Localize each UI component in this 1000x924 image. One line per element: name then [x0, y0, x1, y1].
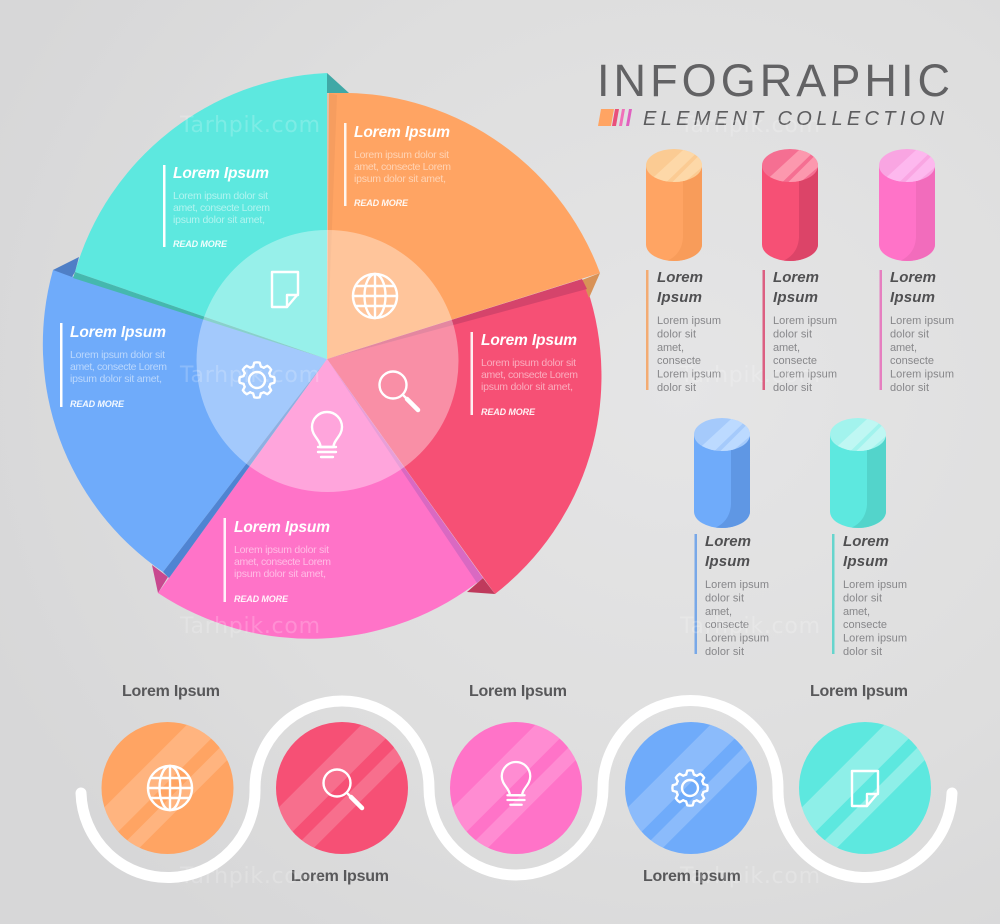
label: red cylinder: Lorem — [773, 269, 819, 286]
colour marks — [598, 109, 632, 126]
text block: blue slice: Lorem ipsum dolor sit — [70, 349, 165, 361]
label: blue cylinder: consecte — [705, 619, 749, 631]
label: teal cylinder: Lorem ipsum — [843, 632, 907, 644]
step label 5: Lorem Ipsum — [810, 683, 908, 700]
label: teal cylinder: Lorem — [843, 533, 889, 550]
text block: orange slice: READ MORE — [354, 198, 409, 208]
step: orange circle — [96, 717, 234, 854]
label: orange cylinder: dolor sit — [657, 382, 696, 394]
text block: pink slice: amet, consecte Lorem — [234, 556, 331, 568]
icon: search — [324, 770, 362, 808]
watermarks: Tarhpik.com — [179, 864, 320, 889]
text block: blue slice: ipsum dolor sit amet, — [70, 373, 162, 385]
label: orange cylinder: Lorem ipsum — [657, 315, 721, 327]
cylinder: orange — [646, 146, 704, 261]
text block: teal slice: Lorem ipsum dolor sit — [173, 190, 268, 202]
text block: red slice: ipsum dolor sit amet, — [481, 381, 573, 393]
text block: red slice: READ MORE — [481, 407, 536, 417]
label: blue cylinder — [694, 533, 769, 658]
label: red cylinder: amet, — [773, 342, 800, 354]
label: blue cylinder: Lorem — [705, 533, 751, 550]
label: teal cylinder: amet, — [843, 606, 870, 618]
text block: blue slice: amet, consecte Lorem — [70, 361, 167, 373]
label: blue cylinder: Ipsum — [705, 553, 750, 570]
label: orange cylinder: Ipsum — [657, 289, 702, 306]
label: teal cylinder: dolor sit — [843, 646, 882, 658]
step: teal circle — [794, 717, 931, 854]
center disc — [196, 230, 458, 492]
step: pink circle — [445, 717, 582, 854]
text block: orange slice: Lorem ipsum dolor sit — [354, 149, 449, 161]
text block: blue slice: Lorem Ipsum — [70, 324, 166, 341]
fold: red flap — [467, 578, 495, 594]
watermarks — [179, 113, 820, 889]
label: blue cylinder: dolor sit — [705, 646, 744, 658]
text block: orange slice: ipsum dolor sit amet, — [354, 173, 446, 185]
cylinder: blue — [694, 414, 752, 528]
text block: red slice: amet, consecte Lorem — [481, 369, 578, 381]
fold: teal flap — [327, 73, 349, 93]
icon: document — [272, 272, 298, 307]
label: blue cylinder: dolor sit — [705, 592, 744, 604]
icon: document — [852, 771, 878, 806]
label: red cylinder: consecte — [773, 355, 817, 367]
icon: globe — [353, 274, 397, 318]
label: teal cylinder: consecte — [843, 619, 887, 631]
text block: red slice: Lorem Ipsum — [481, 332, 577, 349]
watermarks: Tarhpik.com — [679, 113, 820, 138]
cylinder: pink — [879, 146, 937, 261]
slice: pink — [158, 359, 483, 639]
label: orange cylinder: Lorem ipsum — [657, 368, 721, 380]
icon: search — [380, 372, 418, 410]
pie chart — [43, 73, 601, 639]
text block: teal slice: amet, consecte Lorem — [173, 202, 270, 214]
text block: orange slice: Lorem Ipsum — [354, 124, 450, 141]
text block: teal slice: Lorem Ipsum — [173, 165, 269, 182]
text block: blue slice: READ MORE — [70, 399, 125, 409]
title — [597, 55, 950, 130]
label: pink cylinder: dolor sit — [890, 382, 929, 394]
step label 1: Lorem Ipsum — [122, 683, 220, 700]
step label 2: Lorem Ipsum — [291, 868, 389, 885]
label: teal cylinder: dolor sit — [843, 592, 882, 604]
text block: orange slice: amet, consecte Lorem — [354, 161, 451, 173]
label: orange cylinder: consecte — [657, 355, 701, 367]
slice: blue — [43, 270, 327, 572]
fold: blue strip — [163, 359, 327, 578]
icon: globe — [148, 766, 192, 810]
label: pink cylinder: Lorem — [890, 269, 936, 286]
text block: teal slice: READ MORE — [173, 239, 228, 249]
label: orange cylinder: Lorem — [657, 269, 703, 286]
step label 4: Lorem Ipsum — [643, 868, 741, 885]
watermarks: Tarhpik.com — [679, 363, 820, 388]
text block: pink slice: READ MORE — [234, 594, 289, 604]
fold: purple strip — [327, 359, 483, 583]
fold: red strip — [327, 279, 587, 359]
label: teal cylinder — [832, 533, 907, 658]
label: teal cylinder: Ipsum — [843, 553, 888, 570]
label: red cylinder: dolor sit — [773, 382, 812, 394]
watermarks: Tarhpik.com — [679, 864, 820, 889]
watermarks: Tarhpik.com — [179, 363, 320, 388]
step: blue circle — [620, 717, 757, 854]
fold: blue flap — [53, 257, 79, 277]
label: orange cylinder — [646, 269, 721, 394]
label: pink cylinder: dolor sit — [890, 328, 929, 340]
label: pink cylinder: Lorem ipsum — [890, 315, 954, 327]
label: blue cylinder: Lorem ipsum — [705, 579, 769, 591]
text block: blue slice — [60, 323, 167, 409]
label: red cylinder: Lorem ipsum — [773, 368, 837, 380]
text block: orange slice — [344, 123, 451, 208]
text block: red slice: Lorem ipsum dolor sit — [481, 357, 576, 369]
label: pink cylinder: Lorem ipsum — [890, 368, 954, 380]
cylinder: teal — [830, 414, 888, 528]
text block: pink slice — [224, 518, 331, 604]
slice: orange — [327, 93, 600, 359]
label: orange cylinder: dolor sit — [657, 328, 696, 340]
label: red cylinder: dolor sit — [773, 328, 812, 340]
fold: orange flap — [582, 273, 600, 298]
fold: orange left shade — [327, 93, 337, 358]
slice: teal — [75, 73, 327, 359]
text block: pink slice: Lorem Ipsum — [234, 519, 330, 536]
label: pink cylinder — [880, 269, 954, 394]
watermarks: Tarhpik.com — [179, 614, 320, 639]
cylinder: red — [762, 146, 820, 261]
slice: red — [327, 288, 601, 594]
icon: bulb — [502, 762, 530, 805]
fold: pink flap — [152, 565, 168, 593]
text block: teal slice — [163, 165, 270, 249]
watermarks: Tarhpik.com — [179, 113, 320, 138]
watermarks: Tarhpik.com — [679, 614, 820, 639]
text block: pink slice: Lorem ipsum dolor sit — [234, 544, 329, 556]
label: teal cylinder: Lorem ipsum — [843, 579, 907, 591]
text block: pink slice: ipsum dolor sit amet, — [234, 568, 326, 580]
timeline wave — [81, 701, 952, 878]
label: pink cylinder: consecte — [890, 355, 934, 367]
fold: teal strip — [73, 272, 327, 359]
text block: teal slice: ipsum dolor sit amet, — [173, 214, 265, 226]
label: blue cylinder: Lorem ipsum — [705, 632, 769, 644]
label: red cylinder: Lorem ipsum — [773, 315, 837, 327]
label: red cylinder: Ipsum — [773, 289, 818, 306]
subtitle: ELEMENT COLLECTION — [643, 108, 945, 130]
label: pink cylinder: amet, — [890, 342, 917, 354]
icon: gear — [672, 770, 708, 806]
label: red cylinder — [762, 269, 837, 394]
label: orange cylinder: amet, — [657, 342, 684, 354]
label: pink cylinder: Ipsum — [890, 289, 935, 306]
text block: red slice — [470, 332, 578, 417]
step label 3: Lorem Ipsum — [469, 683, 567, 700]
icon: bulb — [312, 412, 342, 457]
title: INFOGRAPHIC — [597, 55, 950, 106]
label: blue cylinder: amet, — [705, 606, 732, 618]
icon: gear — [239, 362, 275, 398]
step: red circle — [271, 717, 408, 854]
